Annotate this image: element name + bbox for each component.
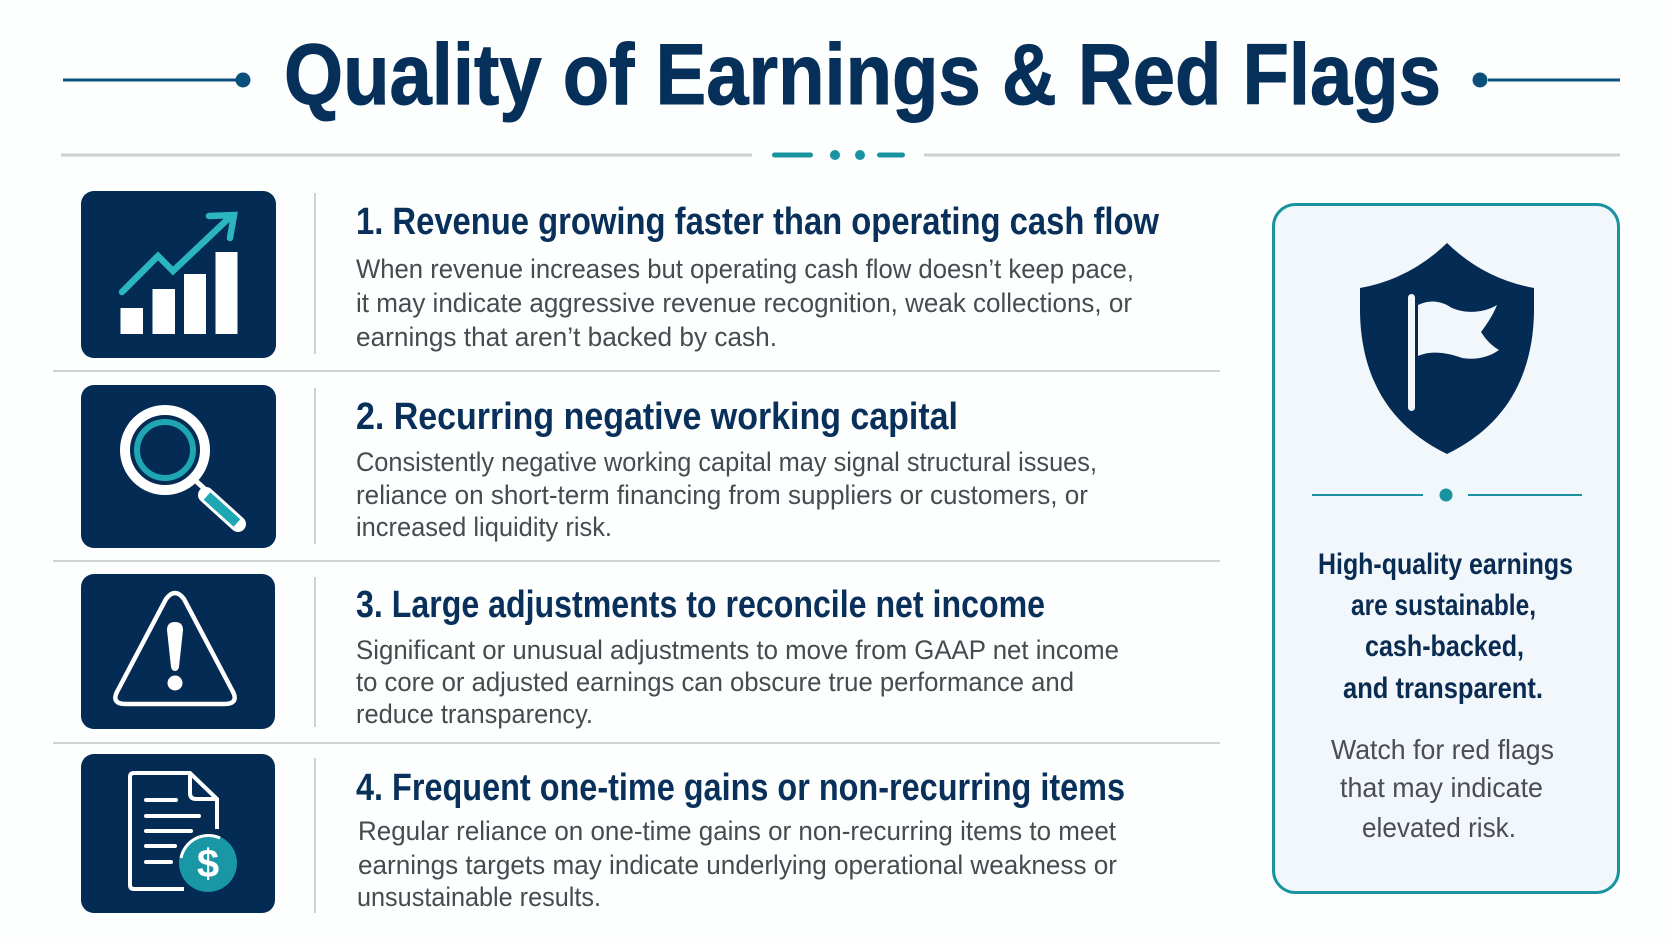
icon: document with dollar coin [81, 754, 275, 913]
title: Quality of Earnings & Red Flags [284, 27, 1441, 123]
panel: takeaway [1274, 204, 1618, 892]
text: item 3 description: Significant or unusual adjustments to move from GAAP net income [356, 635, 1119, 665]
text: item 2 description: increased liquidity risk. [356, 512, 612, 542]
heading: item 4: 4. Frequent one-time gains or non-recurring items [356, 767, 1125, 809]
text: watch for red flags: Watch for red flags [1331, 734, 1554, 765]
icon: rising bar chart with arrow [81, 191, 276, 358]
row 2 [81, 385, 1097, 548]
heading: item 1: 1. Revenue growing faster than operating cash flow [356, 201, 1159, 243]
text: item 2 description [356, 447, 1097, 542]
text: item 4 description: unsustainable results. [357, 882, 601, 912]
row 4 [81, 754, 1125, 913]
text: item 3 description: reduce transparency. [356, 699, 593, 729]
row 1 [81, 191, 1159, 358]
title ornament: right line and dot [1472, 72, 1620, 88]
text: item 4 description [357, 816, 1117, 912]
text: item 1 description: earnings that aren’t backed by cash. [356, 322, 777, 352]
text: item 3 description: to core or adjusted earnings can obscure true performance and [356, 667, 1074, 697]
icon: warning triangle [81, 574, 275, 729]
text: item 1 description: it may indicate aggressive revenue recognition, weak collections, or [356, 288, 1132, 318]
text: item 1 description: When revenue increases but operating cash flow doesn’t keep pace, [356, 254, 1134, 284]
text: item 1 description [356, 254, 1134, 352]
row 3 [81, 574, 1119, 729]
text: high-quality earnings statement: are sustainable, [1351, 589, 1536, 622]
heading: item 3: 3. Large adjustments to reconcile net income [356, 584, 1045, 626]
header divider accent [772, 150, 905, 160]
text: item 2 description: Consistently negative working capital may signal structural issues, [356, 447, 1097, 477]
heading: item 2: 2. Recurring negative working capital [356, 396, 958, 438]
panel divider [1312, 488, 1582, 502]
text: watch for red flags [1331, 734, 1554, 843]
text: high-quality earnings statement: cash-backed, [1365, 630, 1524, 663]
text: item 3 description [356, 635, 1119, 729]
icon: document with dollar coin: $ [197, 842, 219, 886]
text: high-quality earnings statement [1318, 548, 1573, 705]
text: high-quality earnings statement: High-quality earnings [1318, 548, 1573, 581]
text: item 2 description: reliance on short-term financing from suppliers or customers, or [356, 480, 1088, 510]
title ornament: left line and dot [63, 72, 250, 88]
text: item 4 description: earnings targets may indicate underlying operational weakness or [358, 850, 1117, 880]
text: watch for red flags: elevated risk. [1362, 812, 1516, 843]
text: watch for red flags: that may indicate [1340, 772, 1543, 803]
text: item 4 description: Regular reliance on one-time gains or non-recurring items to meet [358, 816, 1117, 846]
text: high-quality earnings statement: and transparent. [1343, 672, 1543, 705]
icon: shield with flag [1360, 243, 1534, 454]
icon: magnifying glass [81, 385, 276, 548]
